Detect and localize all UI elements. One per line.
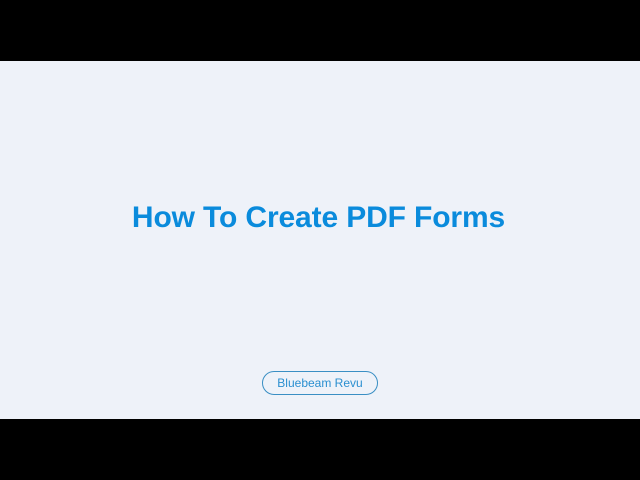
badge: Bluebeam Revu [262, 371, 378, 395]
title: How To Create PDF Forms [132, 201, 505, 234]
panel: slide background [0, 61, 640, 419]
badge: Bluebeam Revu: Bluebeam Revu [277, 376, 363, 390]
